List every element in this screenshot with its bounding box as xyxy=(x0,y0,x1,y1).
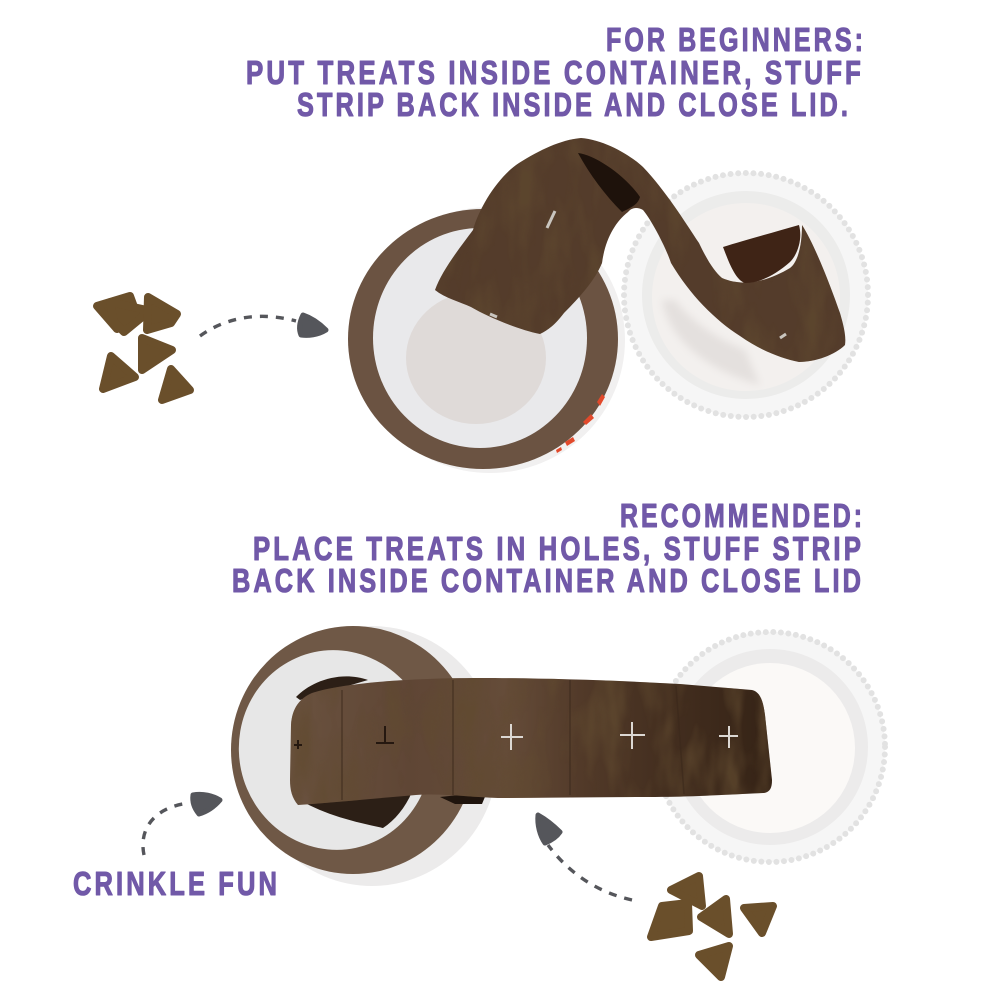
right container base xyxy=(624,173,868,417)
label: crinkle fun: CRINKLE FUN xyxy=(73,865,280,902)
arrow: treats to strip xyxy=(538,815,632,900)
heading: recommended xyxy=(232,497,865,599)
shadow under strip xyxy=(440,792,487,804)
slits xyxy=(490,211,786,338)
plush strip, top xyxy=(430,135,850,365)
left container shell xyxy=(246,626,498,886)
left container floor xyxy=(406,292,546,424)
icon: treats, top left xyxy=(97,296,190,400)
left container plush ring xyxy=(348,209,618,469)
heading: for beginners xyxy=(246,21,866,123)
toy: open container with strip, top xyxy=(348,135,868,473)
toy: container with strip laid flat, bottom xyxy=(220,626,885,886)
icon: treats, bottom right xyxy=(651,876,773,977)
heading: for beginners: STRIP BACK INSIDE AND CLOSE LID. xyxy=(297,86,851,123)
slits: cross stitches xyxy=(294,722,738,750)
right container base xyxy=(655,632,885,862)
heading: for beginners: FOR BEGINNERS: xyxy=(606,21,866,58)
dark gap in strip xyxy=(578,153,640,212)
left container white rim xyxy=(373,228,587,448)
left container plush ring xyxy=(231,626,475,874)
left container shell xyxy=(355,207,625,473)
arrow: treats to container xyxy=(200,315,326,336)
left container dark interior below strip xyxy=(300,792,412,828)
plush strip, bottom xyxy=(288,676,774,808)
heading: recommended: RECOMMENDED: xyxy=(620,497,865,534)
left container white rim xyxy=(220,632,450,868)
left container dark interior above strip xyxy=(296,676,368,700)
arrow: crinkle fun to container xyxy=(143,794,220,855)
red print xyxy=(556,394,605,453)
dark fold inside strip xyxy=(723,225,800,283)
